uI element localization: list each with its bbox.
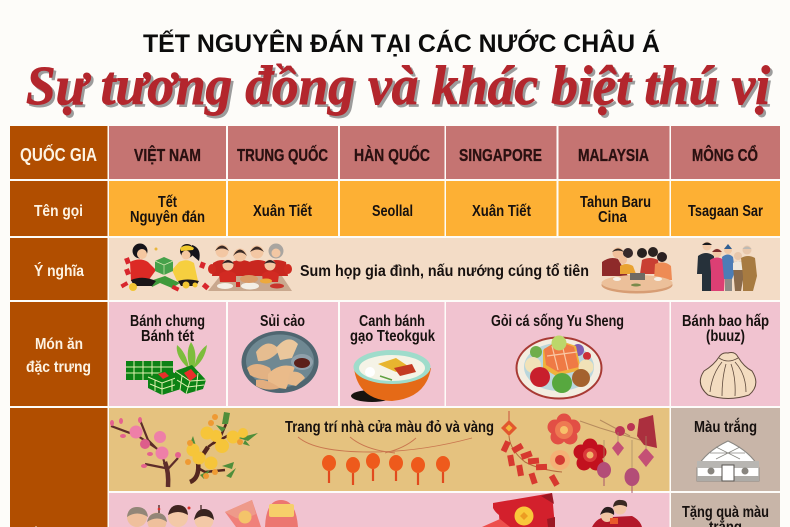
row: names: Tết	[158, 194, 177, 211]
header row: countries: MÔNG CỔ	[692, 144, 758, 165]
row: customs label and decoration panels: Màu trắng	[694, 418, 757, 436]
icon: dumplings plate	[242, 331, 318, 393]
row: names: Seollal	[372, 203, 413, 220]
row: special dishes: gạo Tteokguk	[350, 328, 435, 345]
icon: plum flowers and lanterns	[548, 414, 657, 494]
row: names: Xuân Tiết	[472, 203, 531, 220]
icon: children wrapping banh chung	[120, 244, 210, 292]
icon: large red envelope	[482, 493, 555, 527]
row: special dishes: (buuz)	[706, 328, 745, 345]
row: special dishes: Gỏi cá sống Yu Sheng	[491, 313, 624, 330]
header row: countries: MALAYSIA	[578, 145, 649, 165]
row: special dishes	[10, 302, 780, 406]
row: special dishes: Canh bánh	[359, 313, 425, 330]
icon: white yurt	[697, 441, 759, 481]
header row: countries	[10, 126, 780, 179]
row: customs label and decoration panels: Trang trí nhà cửa màu đỏ và vàng	[285, 419, 494, 436]
row: meaning: Ý nghĩa	[34, 262, 84, 280]
icon: tteokguk soup bowl	[351, 350, 431, 402]
row: names: Tên gọi	[34, 203, 83, 220]
icon: banh chung and banh tet	[126, 342, 207, 395]
header row: countries: SINGAPORE	[459, 145, 542, 165]
icon: family with grandparents	[127, 505, 214, 527]
icon: pink envelopes	[225, 500, 298, 527]
row: names: Tsagaan Sar	[688, 203, 763, 220]
row: meaning	[10, 238, 780, 300]
header row: countries: QUỐC GIA	[20, 144, 97, 165]
icon: peach blossom branch	[110, 417, 181, 487]
row: names: Xuân Tiết	[253, 203, 312, 220]
title: subtitle line: TẾT NGUYÊN ĐÁN TẠI CÁC NƯỚC CHÂU Á	[143, 28, 660, 58]
row: names: Cina	[598, 209, 627, 226]
row: special dishes: Sủi cảo	[260, 313, 305, 330]
icon: yellow apricot blossom branch	[185, 412, 258, 482]
row: special dishes: Bánh chưng	[130, 313, 205, 330]
row: names	[10, 181, 780, 236]
header row: countries: HÀN QUỐC	[354, 144, 430, 165]
icon: steamed bun buuz	[700, 352, 756, 398]
icon: family at reunion table	[208, 244, 292, 291]
row: names: Nguyên đán	[130, 209, 205, 226]
icon: Mongolian family	[697, 242, 757, 291]
row: special dishes: Bánh tét	[141, 328, 194, 345]
row: names: Tahun Baru	[580, 194, 651, 211]
row: customs label and decoration panels	[10, 408, 780, 527]
row: gift panels: Tặng quà màu	[682, 504, 769, 521]
header row: countries: TRUNG QUỐC	[237, 144, 328, 165]
row: special dishes: Bánh bao hấp	[682, 313, 769, 330]
icon: couple with gift	[592, 500, 642, 527]
row: special dishes: đặc trưng	[26, 359, 91, 376]
icon: lantern garland	[298, 437, 472, 485]
title: main script heading: Sự tương đồng và khác biệt thú vị	[28, 58, 773, 118]
row: gift panels	[25, 493, 780, 527]
icon: yu sheng plate	[516, 336, 602, 398]
header row: countries: VIỆT NAM	[134, 144, 201, 165]
title: main script heading: Sự tương đồng và khác biệt thú vị	[26, 55, 771, 116]
icon: family around round table	[602, 247, 672, 294]
icon: firecrackers and ornament	[501, 411, 562, 487]
row: special dishes: Món ăn	[35, 336, 83, 353]
row: meaning: Sum họp gia đình, nấu nướng cúng tổ tiên	[300, 263, 589, 280]
